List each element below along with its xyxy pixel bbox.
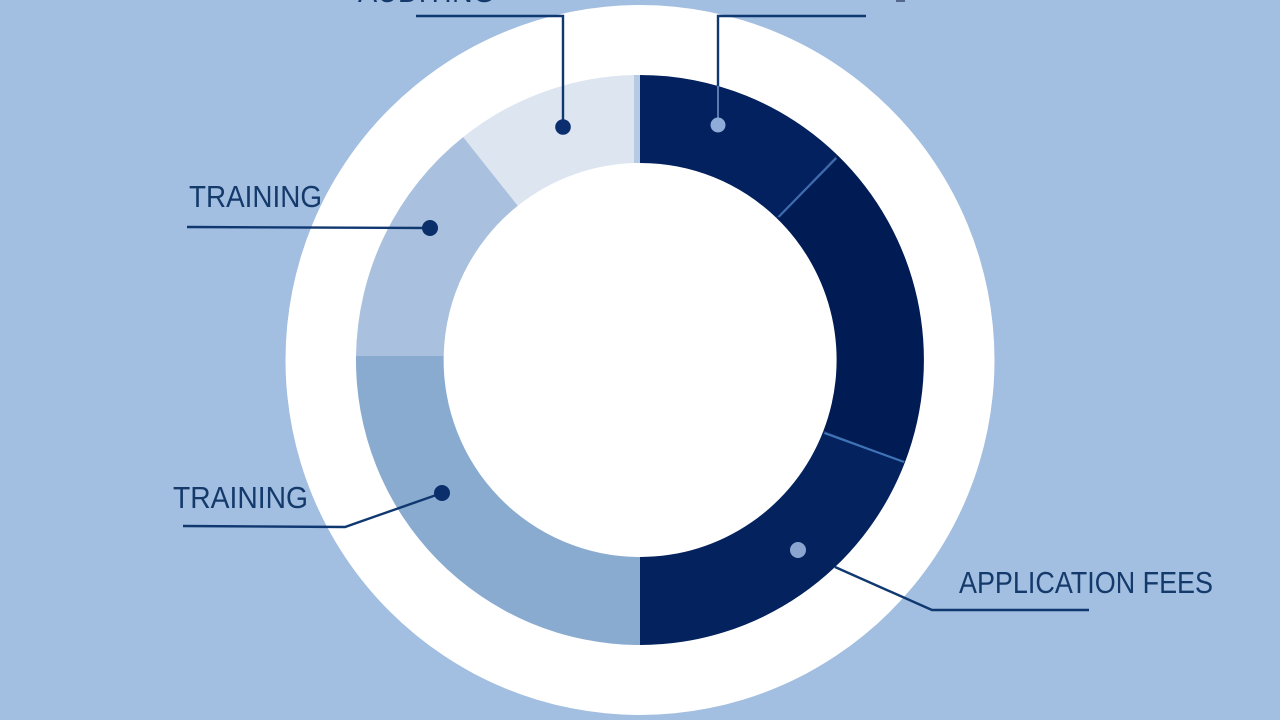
callout: auditing (358, 0, 571, 135)
leader line inside dark segment (717, 86, 719, 125)
dot: training lower (434, 485, 450, 501)
donut chart (356, 75, 924, 645)
label: application fees: APPLICATION FEES (959, 565, 1213, 600)
segment: auditing (463, 75, 640, 206)
label: training upper: TRAINING (189, 179, 322, 214)
callout: upper right (710, 0, 905, 132)
leader line: training upper (187, 227, 430, 228)
segment: upper left training (356, 137, 518, 356)
segment divider lower (824, 433, 904, 462)
dot: upper right (710, 118, 726, 132)
segment: lower left training (356, 355, 640, 645)
thin strip beside the top of the auditing segment (634, 75, 640, 163)
clipped label remnant (896, 0, 905, 2)
callout: application fees (790, 542, 1213, 610)
segment: application fees (640, 431, 905, 645)
segment: upper right dark (640, 75, 837, 218)
callout: training lower (173, 480, 450, 527)
leader line: application fees (835, 567, 1089, 610)
leader line: upper right (718, 16, 866, 88)
leader line: training lower (183, 493, 442, 527)
dot: training upper (422, 220, 438, 236)
leader line: auditing (416, 16, 563, 127)
label: training lower: TRAINING (173, 480, 308, 515)
segment divider upper (779, 158, 836, 217)
segment: right darkest (777, 155, 924, 462)
callout: training upper (187, 179, 438, 236)
dot: auditing (555, 119, 571, 135)
dot: application fees (790, 542, 806, 558)
outer white ring (286, 5, 994, 715)
